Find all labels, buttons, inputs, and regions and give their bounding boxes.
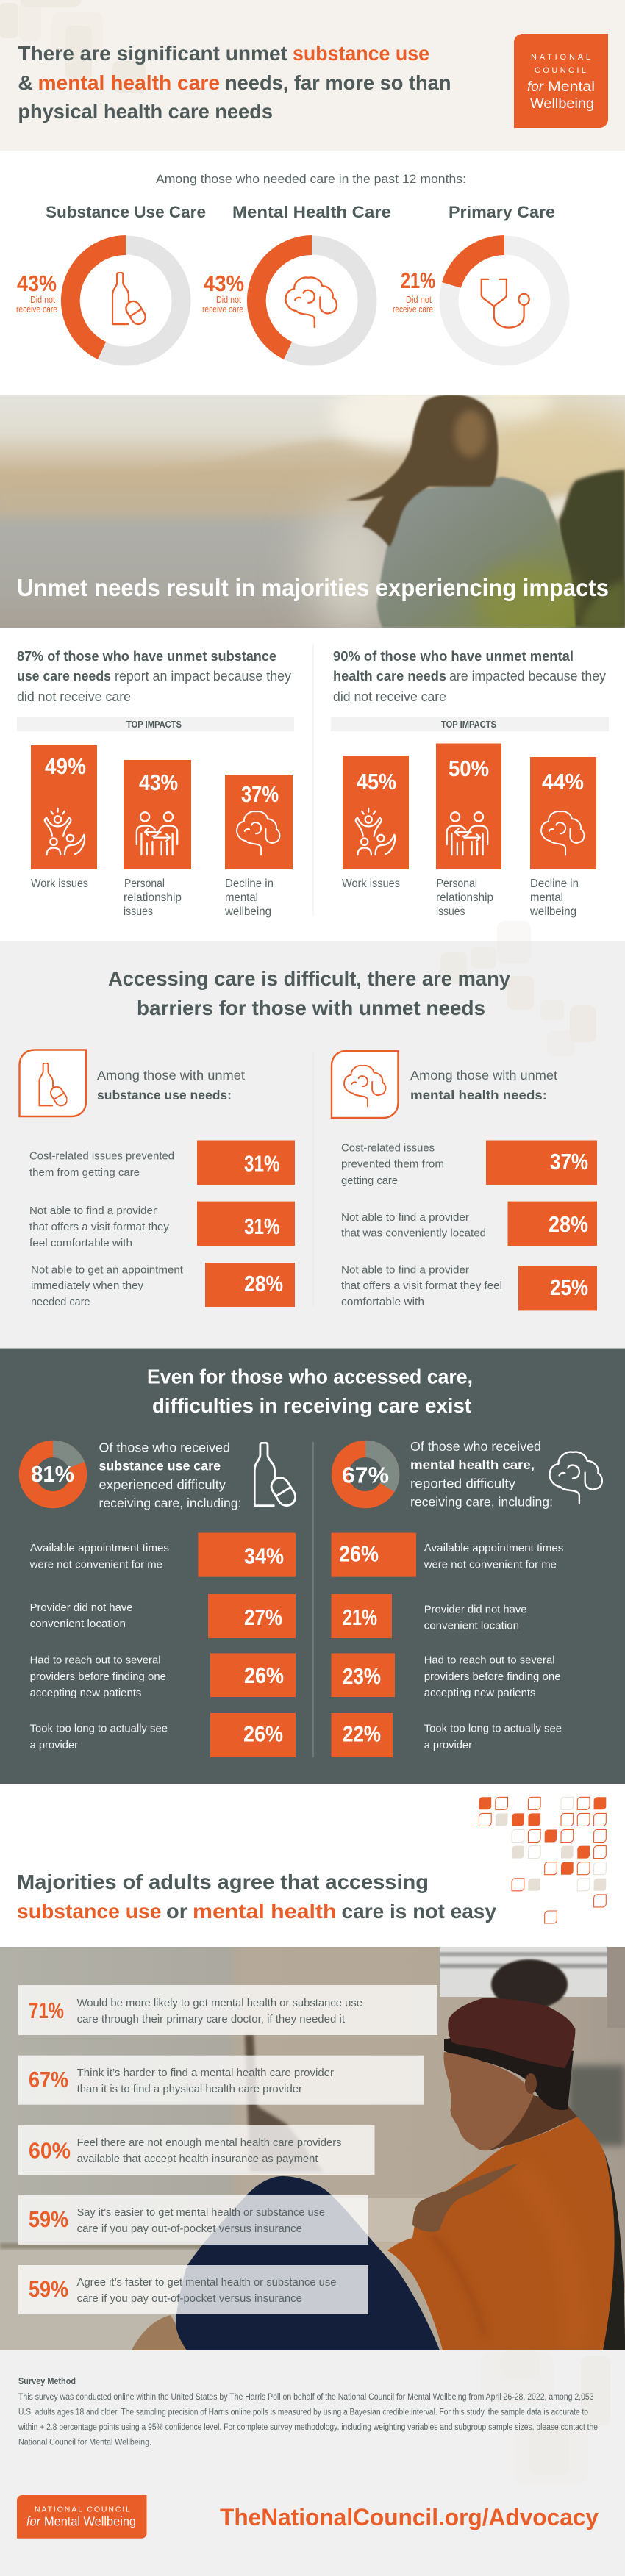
row: appointment times 34% [29, 1533, 296, 1577]
icon: brain [285, 277, 337, 327]
bar: decline in mental wellbeing 37% [224, 775, 293, 918]
bar: decline in mental wellbeing 44%: mental [530, 891, 563, 904]
row: appointment 28%: immediately when they [31, 1280, 143, 1292]
row: location 27% [30, 1594, 296, 1638]
row: took too long 26%: a provider [30, 1739, 78, 1751]
text block: mental health care: Of those who received [410, 1439, 541, 1454]
chart: 81% donut [27, 1441, 85, 1500]
couch and wall shadow [568, 2065, 625, 2146]
panel: barriers to accessing care [0, 921, 625, 1348]
text block: substance use care: receiving care, including: [99, 1496, 241, 1510]
footer panel [0, 2350, 625, 2576]
bar: personal relationship issues 43%: Personal [124, 878, 165, 890]
row: several providers 26%: providers before finding one [30, 1671, 166, 1683]
stat: 59% easier: Say it’s easier to get mental health or substance use [77, 2206, 325, 2219]
row: cost issues 37%: prevented them from [341, 1158, 444, 1171]
icon: brain tile [332, 1051, 399, 1118]
row: appointment 28% [31, 1263, 295, 1308]
row: took too long 26%: 26% [243, 1721, 283, 1747]
row: appointment 28%: 28% [244, 1271, 283, 1296]
chart: substance use care donut: 43% [17, 270, 57, 296]
chart: primary care donut [393, 203, 560, 356]
logo [514, 34, 608, 128]
survey method text [18, 2376, 598, 2447]
row: cost issues 37%: Cost-related issues [341, 1142, 435, 1154]
title: & [18, 71, 33, 94]
stat: 59% faster: 59% [29, 2276, 68, 2302]
stat: 59% faster: care if you pay out-of-pocket versus insurance [77, 2292, 302, 2305]
hand [413, 2163, 519, 2232]
title: physical health care needs [18, 100, 273, 123]
text block: mental health care [410, 1439, 553, 1510]
stat: 60%: Feel there are not enough mental health care providers [77, 2136, 341, 2149]
bar: personal relationship issues 50%: issues [436, 905, 465, 918]
chart: primary care donut: receive care [393, 304, 433, 315]
top impacts band: TOP IMPACTS [126, 720, 182, 730]
website url: TheNationalCouncil.org/Advocacy [220, 2504, 599, 2530]
heading: majorities of adults: Majorities of adults agree that accessing [17, 1870, 429, 1893]
headband [448, 1998, 575, 2068]
text block: mental health impact summary: health care needs [333, 668, 446, 684]
stat: 71%: 71% [29, 1998, 64, 2023]
stat: 59% easier [18, 2195, 368, 2245]
row: appointment 28%: Not able to get an appointment [31, 1264, 184, 1276]
title: needs, far more so than [225, 71, 451, 94]
icon: bottle [254, 1443, 299, 1509]
text block: mental health care: receiving care, including: [410, 1495, 553, 1510]
row: took too long 22%: Took too long to actually see [424, 1723, 562, 1735]
stat: 59% easier: 59% [29, 2206, 68, 2232]
bar: decline in mental wellbeing 44%: wellbeing [529, 905, 576, 918]
row: took too long 26%: Took too long to actually see [30, 1723, 168, 1735]
text block: substance use impact summary: use care needs [17, 668, 111, 684]
legs [132, 2315, 191, 2350]
chart: substance use care donut: receive care [16, 304, 57, 315]
heading: Even for those who accessed care, [147, 1365, 473, 1388]
row: location 27%: Provider did not have [30, 1601, 132, 1614]
bar: decline in mental wellbeing 37%: mental [225, 891, 258, 904]
text block: substance use impact summary [17, 648, 292, 704]
heading: Accessing care is difficult, there are many [108, 967, 511, 990]
chart: mental health care donut [202, 203, 391, 359]
heading: barriers for those with unmet needs [137, 997, 485, 1019]
logo: Mental [548, 79, 595, 95]
panel: impacts mental health [331, 648, 609, 918]
decorative square pattern [479, 1797, 606, 1923]
bar: personal relationship issues 50%: Personal [437, 878, 477, 890]
title: substance use [293, 42, 429, 65]
row: visit format 31%: 31% [244, 1213, 279, 1239]
heading: difficulties in receiving care exist [152, 1394, 471, 1417]
stat: 71%: Would be more likely to get mental health or substance use [77, 1997, 362, 2009]
text block: mental health impact summary: 90% of those who have unmet mental [333, 648, 574, 664]
text block: substance use care: experienced difficulty [99, 1477, 226, 1492]
bar: work issues 49% [31, 745, 97, 890]
heading: majorities of adults: or [166, 1900, 188, 1923]
row: visit format 31% [29, 1202, 295, 1249]
sweater [388, 2117, 616, 2350]
chart: substance use care donut [16, 203, 206, 359]
chart: primary care donut: 21% [401, 268, 435, 293]
logo: for [527, 79, 544, 95]
row: appointment times 34%: were not convenient for me [29, 1558, 162, 1571]
row: several providers 26%: Had to reach out to several [30, 1654, 160, 1667]
top impacts band [331, 717, 609, 731]
row: location 27%: convenient location [30, 1618, 126, 1630]
text block: mental health impact summary: are impacted because they [449, 668, 607, 684]
bun [491, 1959, 568, 2009]
stat: 60%: 60% [29, 2138, 71, 2164]
bar: work issues 45%: 45% [357, 769, 396, 794]
stat: 67%: 67% [29, 2067, 68, 2092]
photo panel: woman in orange sweater [0, 1947, 625, 2350]
stat: 59% faster: Agree it’s faster to get mental health or substance use [77, 2276, 336, 2289]
text block: mental health care: mental health care, [410, 1457, 535, 1472]
row: visit format 25%: comfortable with [341, 1296, 424, 1308]
row: cost issues 37%: getting care [341, 1174, 398, 1187]
chart: mental health care donut: Mental Health Care [232, 203, 391, 221]
row: cost issues 37%: 37% [550, 1149, 588, 1174]
bar: personal relationship issues 43%: issues [124, 905, 153, 918]
row: location 28%: 28% [549, 1211, 588, 1237]
hair [346, 395, 498, 547]
panel: difficulties in receiving care [0, 1348, 625, 1784]
row: took too long 26% [30, 1713, 296, 1757]
row: appointment times 26%: 26% [339, 1541, 379, 1567]
heading: majorities of adults: care is not easy [341, 1900, 497, 1923]
heading: majorities of adults: mental health [193, 1900, 337, 1923]
bar: personal relationship issues 50%: relationship [436, 891, 493, 904]
text block: substance use impact summary: did not receive care [17, 689, 131, 704]
row: took too long 22% [331, 1713, 562, 1757]
text block: mental health impact summary [333, 648, 607, 704]
heading: majorities of adults: substance use [17, 1900, 162, 1923]
logo: NATIONAL [531, 53, 590, 62]
heading [108, 967, 511, 1019]
footer logo: for [26, 2514, 41, 2529]
chart: primary care donut: Primary Care [449, 203, 555, 221]
title: mental health care [38, 71, 220, 94]
heading: majorities of adults [17, 1870, 497, 1923]
row: several providers 23%: Had to reach out to several [424, 1654, 554, 1667]
row: appointment times 26% [331, 1533, 563, 1577]
chart: mental health care donut: Did not [216, 295, 241, 305]
row: several providers 23%: accepting new patients [424, 1687, 535, 1699]
row: several providers 26%: 26% [244, 1662, 284, 1688]
row: cost issues 37% [341, 1141, 597, 1187]
row: location 21%: Provider did not have [424, 1603, 526, 1615]
title: There are significant unmet [18, 42, 288, 65]
row: several providers 26%: accepting new patients [30, 1687, 141, 1699]
chart: substance use care donut: Did not [30, 295, 55, 305]
row: location 21% [331, 1594, 526, 1638]
chart: mental health care donut: receive care [202, 304, 243, 315]
chart: mental health care donut: 43% [204, 270, 244, 296]
stat: 71%: care through their primary care doctor, if they needed it [77, 2013, 346, 2026]
text block: substance use impact summary: 87% of those who have unmet substance [17, 648, 276, 664]
text block: substance use care: Of those who received [99, 1440, 230, 1454]
bar: personal relationship issues 43% [124, 760, 191, 918]
sweater [377, 477, 576, 628]
subheading: substance use needs: Among those with unmet [97, 1068, 245, 1083]
row: visit format 25%: 25% [550, 1274, 588, 1300]
survey method text: Survey Method [18, 2376, 76, 2386]
stat: 60%: available that accept health insurance as payment [77, 2153, 318, 2165]
bar: personal relationship issues 50%: 50% [449, 756, 489, 781]
title [18, 42, 451, 123]
stat: 67%: than it is to find a physical health care provider [77, 2083, 302, 2095]
row: cost issues 31% [29, 1141, 295, 1185]
icon: brain [550, 1452, 602, 1504]
chart: primary care donut: Did not [406, 295, 432, 305]
bar: decline in mental wellbeing 44%: 44% [542, 769, 584, 794]
photo banner: woman by the sea [0, 382, 625, 636]
row: several providers 26% [30, 1653, 296, 1699]
text block: substance use care: substance use care [99, 1459, 221, 1474]
heading [147, 1365, 473, 1417]
row: several providers 23%: 23% [343, 1663, 381, 1689]
row: took too long 22%: 22% [343, 1721, 381, 1747]
footer logo: Mental Wellbeing [44, 2514, 136, 2529]
text block: substance use impact summary: report an impact because they [115, 668, 292, 684]
text block: mental health impact summary: did not receive care [333, 689, 446, 704]
bar: decline in mental wellbeing 37%: Decline in [225, 878, 274, 890]
row: visit format 25%: that offers a visit format they feel [341, 1280, 502, 1292]
row: took too long 22%: a provider [424, 1739, 472, 1751]
icon: bottle and pill [113, 273, 148, 327]
bar: work issues 45%: Work issues [342, 878, 400, 890]
survey method text: National Council for Mental Wellbeing. [18, 2439, 151, 2447]
hair under band [444, 2037, 574, 2110]
bar: work issues 49%: Work issues [31, 878, 88, 890]
chart: 81% donut: 81% [31, 1461, 74, 1487]
logo: Wellbeing [530, 96, 594, 112]
header panel [0, 0, 625, 151]
bar: decline in mental wellbeing 37%: wellbeing [224, 905, 271, 918]
row: appointment times 26%: Available appointment times [424, 1542, 563, 1554]
footer logo [17, 2495, 147, 2539]
text block: mental health care: reported difficulty [410, 1476, 515, 1490]
subheading: substance use needs: substance use needs: [97, 1088, 232, 1102]
panel: impacts substance use [17, 648, 294, 918]
row: cost issues 31%: them from getting care [29, 1166, 140, 1179]
stat: 67%: Think it’s harder to find a mental health care provider [77, 2067, 334, 2079]
window [440, 1947, 607, 1997]
face [443, 2052, 534, 2150]
row: location 27%: 27% [244, 1604, 282, 1630]
subheading: mental health needs [410, 1068, 557, 1102]
bush [559, 470, 625, 628]
bar: personal relationship issues 43%: relationship [124, 891, 182, 904]
stat: 60% [18, 2125, 375, 2175]
row: cost issues 31%: 31% [244, 1151, 279, 1176]
stat: 71% [18, 1985, 438, 2035]
top impacts band [17, 717, 294, 731]
chart: 67% donut [340, 1441, 399, 1500]
row: location 28% [341, 1202, 597, 1246]
guitar [245, 2034, 324, 2172]
row: location 28%: that was conveniently located [341, 1227, 486, 1239]
logo: COUNCIL [535, 66, 586, 75]
row: several providers 23% [331, 1653, 561, 1699]
subheading: substance use needs [97, 1068, 245, 1102]
bar: decline in mental wellbeing 44% [529, 757, 596, 918]
bar: work issues 45% [342, 756, 409, 890]
row: appointment times 26%: were not convenient for me [424, 1558, 557, 1571]
top impacts band: TOP IMPACTS [441, 720, 496, 730]
row: several providers 23%: providers before finding one [424, 1671, 561, 1683]
row: appointment times 34%: Available appointment times [30, 1542, 169, 1554]
bar: decline in mental wellbeing 37%: 37% [241, 781, 279, 807]
bar: personal relationship issues 50% [436, 744, 501, 918]
row: visit format 31%: feel comfortable with [29, 1237, 132, 1249]
footer logo: NATIONAL COUNCIL [35, 2505, 130, 2514]
text block: substance use care [99, 1440, 241, 1510]
row: location 21%: 21% [343, 1604, 377, 1630]
chart: 67% donut: 67% [342, 1463, 389, 1488]
intro text: Among those who needed care in the past 12 months: [156, 172, 466, 186]
row: visit format 25% [341, 1264, 597, 1310]
row: cost issues 31%: Cost-related issues prevented [29, 1149, 174, 1163]
row: location 28%: Not able to find a provider [341, 1211, 469, 1224]
row: visit format 31%: that offers a visit format they [29, 1221, 170, 1233]
row: appointment 28%: needed care [31, 1296, 90, 1308]
icon: stethoscope [482, 279, 529, 328]
row: location 21%: convenient location [424, 1620, 519, 1632]
chart: substance use care donut: Substance Use Care [46, 203, 206, 221]
subheading: mental health needs: mental health needs: [410, 1088, 547, 1102]
stat: 59% faster [18, 2265, 368, 2314]
bar: work issues 49%: 49% [45, 753, 86, 779]
row: appointment times 34%: 34% [244, 1543, 284, 1569]
icon: bottle tile [19, 1050, 86, 1116]
bar: personal relationship issues 43%: 43% [139, 769, 178, 795]
neck [488, 2095, 577, 2150]
stat: 59% easier: care if you pay out-of-pocket versus insurance [77, 2222, 302, 2235]
row: visit format 31%: Not able to find a provider [29, 1205, 157, 1217]
bar: decline in mental wellbeing 44%: Decline in [530, 878, 579, 890]
row: visit format 25%: Not able to find a provider [341, 1264, 469, 1276]
subheading: mental health needs: Among those with unmet [410, 1068, 557, 1083]
stat: 67% [18, 2056, 424, 2105]
